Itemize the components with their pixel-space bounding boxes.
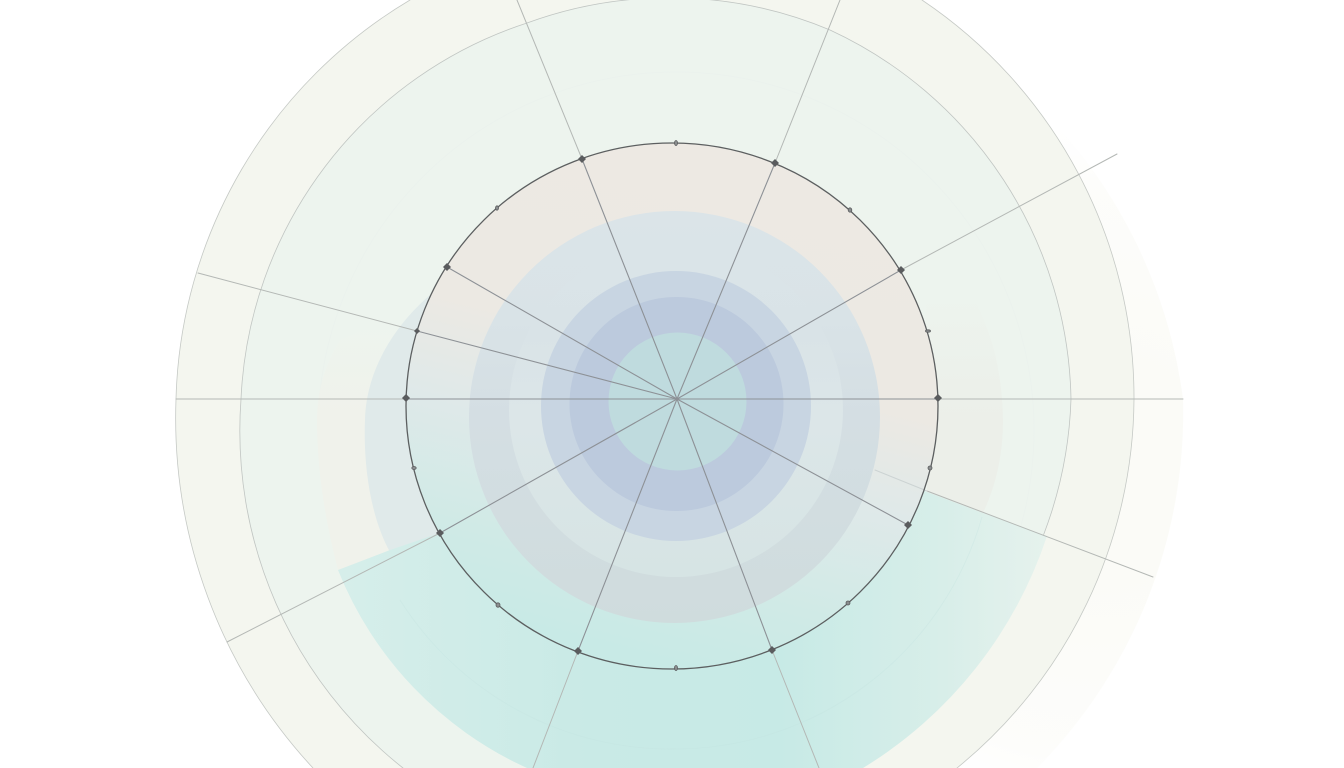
concentric circle 3 bbox=[541, 271, 811, 541]
faint inner arc bbox=[318, 72, 1034, 768]
pale warm band right bbox=[925, 270, 1003, 513]
minor markers bbox=[412, 140, 932, 670]
outer halo on right bbox=[900, 30, 1183, 768]
concentric circle 4 bbox=[570, 297, 784, 511]
radial spokes bbox=[176, 0, 1183, 768]
ring markers bbox=[402, 140, 942, 670]
main dark ring bbox=[406, 143, 938, 669]
outer ring band bbox=[176, 0, 1134, 768]
centre circle bbox=[608, 332, 746, 470]
spokes inside ring bbox=[406, 159, 938, 651]
inner ring fill bbox=[406, 143, 938, 669]
teal lower region bbox=[338, 470, 1047, 768]
concentric circle 2 bbox=[509, 243, 843, 577]
concentric circle 1 bbox=[469, 211, 880, 623]
second ring band bbox=[240, 0, 1071, 768]
spokes outside ring bbox=[176, 0, 1183, 768]
faint teal arc bbox=[400, 517, 982, 749]
blue tinted left band bbox=[365, 295, 480, 552]
major markers bbox=[402, 155, 942, 655]
pale warm band left bbox=[317, 300, 430, 570]
